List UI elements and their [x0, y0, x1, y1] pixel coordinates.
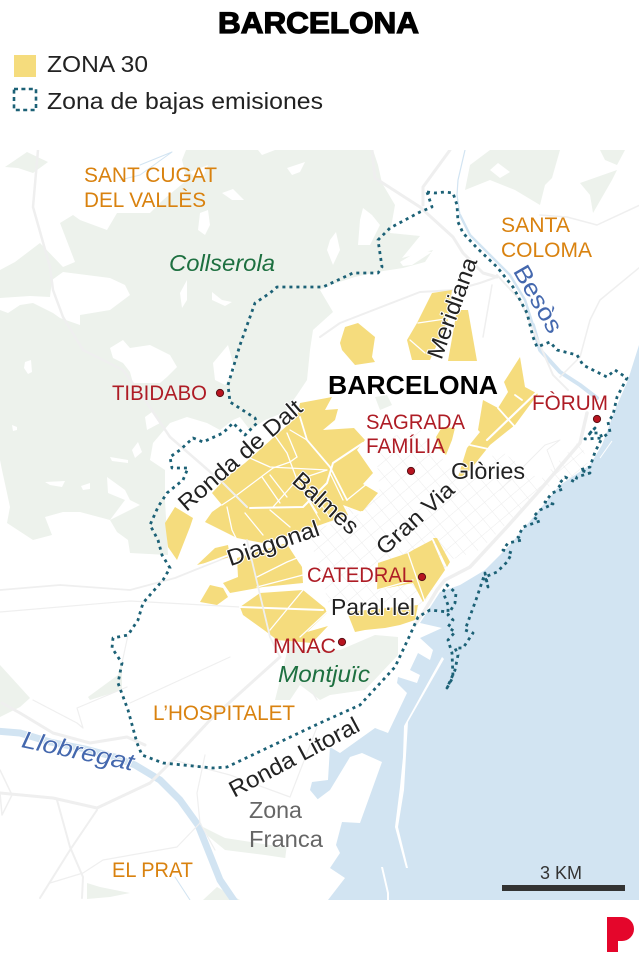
scale bar: 3 KM: [540, 862, 582, 883]
label: Zona Franca: Franca: [249, 826, 323, 852]
legend label: zona 30: ZONA 30: [47, 51, 148, 77]
zone: Sants: [223, 543, 303, 593]
legend swatch: low emissions zone: [14, 89, 36, 110]
label: Sant Cugat del Valles: DEL VALLÈS: [84, 189, 206, 212]
label: Glories: Glòries: [451, 458, 525, 484]
label: Catedral: CATEDRAL: [307, 564, 413, 587]
label: MNAC: MNAC: [273, 635, 336, 658]
label: Montjuic: Montjuïc: [278, 661, 371, 687]
label: Santa Coloma: SANTA: [501, 214, 570, 237]
label: Barcelona: BARCELONA: [328, 370, 498, 400]
label: Llobregat river: Llobregat: [19, 726, 138, 777]
label: Sagrada Familia: [367, 414, 465, 453]
zone: Sagrada Familia: [436, 427, 455, 455]
forest clearings: [0, 162, 510, 520]
label: Sagrada Familia: SAGRADA: [366, 411, 465, 434]
zone: Sant Marti: [457, 357, 538, 480]
label: Collserola: Collserola: [169, 250, 275, 276]
label: Tibidabo: TIBIDABO: [112, 382, 207, 405]
label: Ronda de Dalt: Ronda de Dalt: [173, 394, 308, 516]
zone: Gracia and Sarria: [205, 397, 378, 543]
label: Balmes: Balmes: [288, 467, 364, 539]
label: Diagonal: Diagonal: [223, 515, 323, 571]
marker: Forum: [593, 415, 601, 423]
zone: Sarria west: [165, 507, 193, 560]
icon: publisher logo: [607, 917, 634, 952]
legend swatch: zona 30: [14, 55, 36, 77]
label: Santa Coloma: [502, 218, 592, 257]
label: Gran Via: Gran Via: [371, 476, 460, 560]
label: Meridiana: Meridiana: [422, 254, 482, 362]
zone: Meridiana: [407, 290, 452, 360]
legend label: low emissions zone: Zona de bajas emisiones: [47, 88, 323, 114]
road network: [0, 150, 640, 898]
marker: MNAC: [338, 638, 346, 646]
marker: Catedral: [418, 573, 426, 581]
label: Sagrada Familia: FAMÍLIA: [366, 435, 445, 458]
label: El Prat: EL PRAT: [112, 859, 193, 882]
title: BARCELONA: [218, 7, 419, 40]
zone: Les Corts: [197, 545, 230, 565]
label: Santa Coloma: COLOMA: [501, 239, 592, 262]
zona 30 areas: [165, 290, 538, 643]
legend: [14, 51, 323, 114]
place labels: [19, 164, 608, 882]
label: L'Hospitalet: L’HOSPITALET: [153, 702, 295, 725]
zone: Paral-lel: [347, 605, 418, 632]
label: Besos river: Besòs: [507, 260, 568, 338]
label: Zona Franca: [249, 797, 323, 852]
label: Sant Cugat del Valles: SANT CUGAT: [84, 164, 217, 187]
sea and port: [280, 345, 639, 900]
marker: Sagrada Familia: [407, 467, 415, 475]
city street grid: [305, 430, 590, 610]
label: Sant Cugat del Valles: [85, 168, 217, 207]
scale bar: [502, 862, 625, 891]
forest areas: [0, 150, 625, 900]
label: Ronda Litoral: Ronda Litoral: [224, 712, 364, 802]
rivers: [0, 150, 597, 902]
marker: Tibidabo: [216, 389, 224, 397]
streets across zona 30: [197, 318, 537, 657]
label: Zona Franca: Zona: [249, 797, 302, 823]
label: Paral-lel: Paral·lel: [331, 594, 415, 620]
zone: Ciutat Vella: [377, 540, 445, 602]
low emissions zone boundary: [112, 192, 627, 768]
map: [0, 150, 640, 902]
label: Forum: FÒRUM: [532, 392, 608, 415]
zone: Horta: [340, 323, 375, 365]
